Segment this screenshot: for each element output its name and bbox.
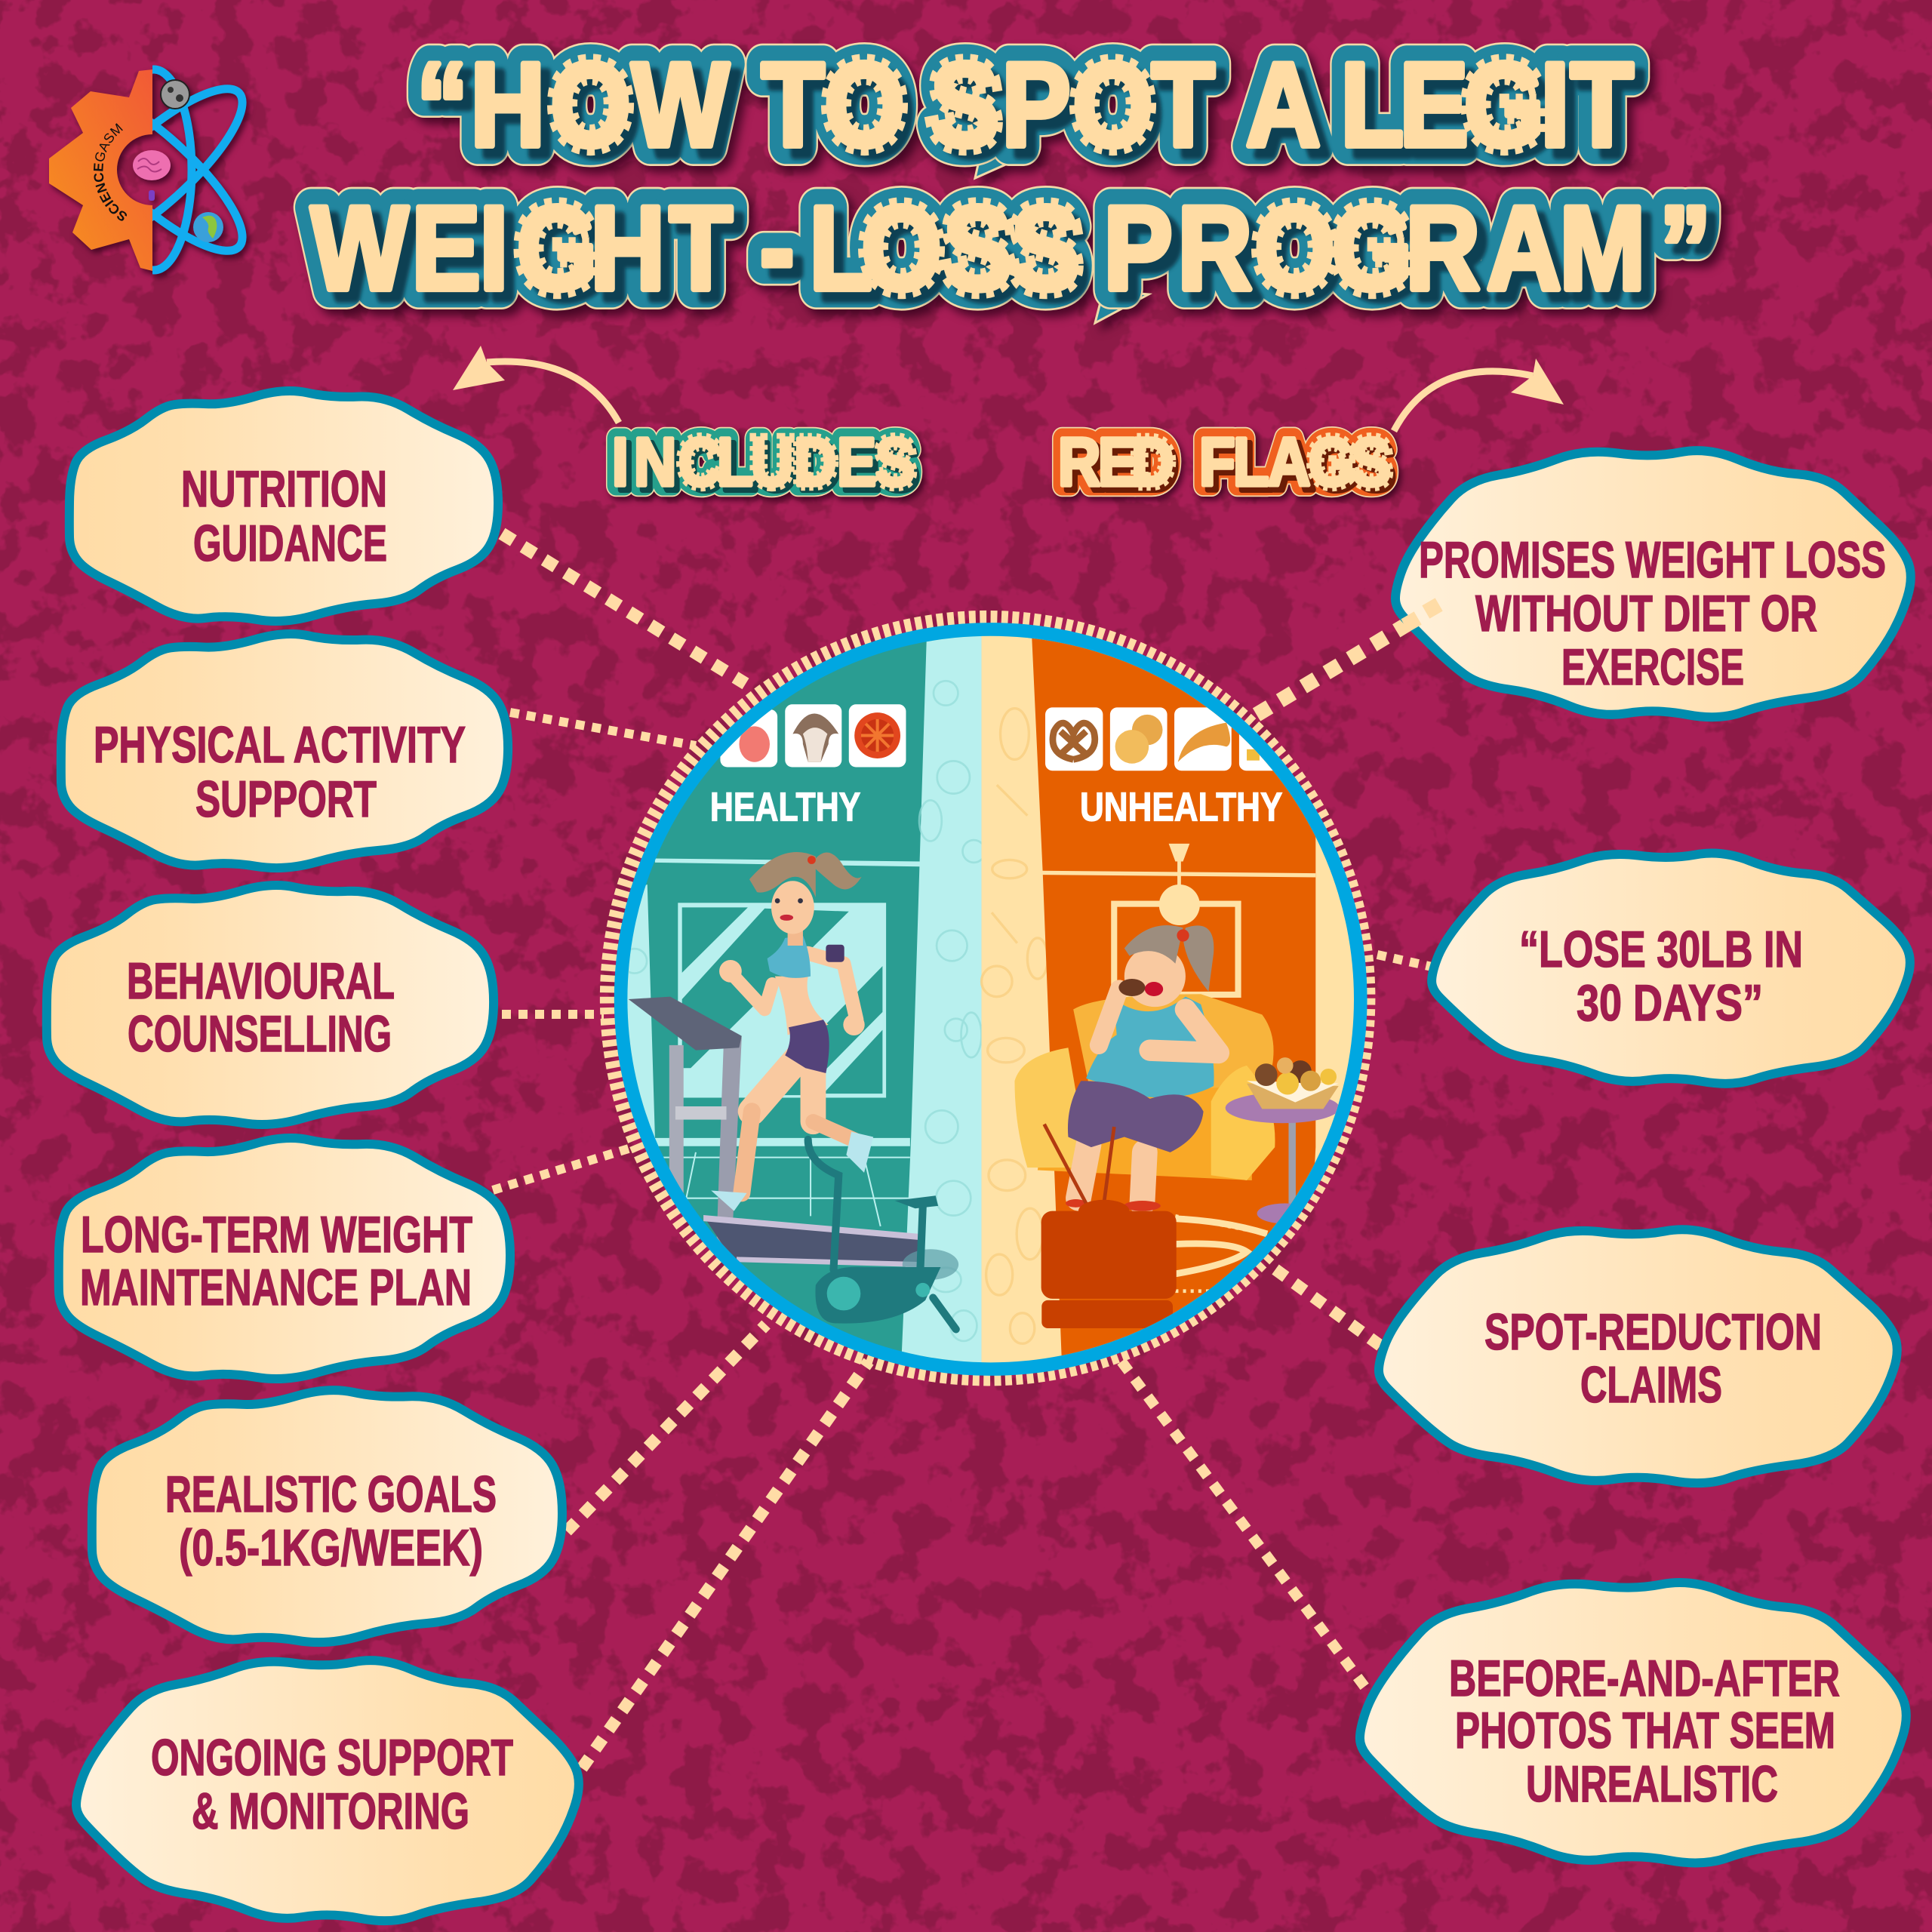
bubble: lose 30lb in 30 days: “LOSE 30LB IN bbox=[1519, 921, 1803, 978]
bubble: lose 30lb in 30 days: 30 DAYS” bbox=[1577, 974, 1763, 1032]
arrow: includes bbox=[453, 346, 619, 423]
heading: includes: INCLUDES bbox=[612, 424, 915, 500]
bubble: nutrition guidance: NUTRITION bbox=[181, 460, 387, 518]
bubble: promises weight loss without diet or exercise: WITHOUT DIET OR bbox=[1475, 585, 1817, 642]
bubble: long-term weight maintenance plan: LONG-TERM WEIGHT bbox=[81, 1206, 472, 1263]
title line 1: “HOW TO SPOT A LEGIT bbox=[426, 48, 1642, 180]
bubble: ongoing support and monitoring bbox=[76, 1660, 579, 1921]
bubble: long-term weight maintenance plan bbox=[59, 1138, 510, 1379]
title line 1: “HOW TO SPOT A LEGIT bbox=[417, 39, 1633, 171]
healthy food cards bbox=[720, 704, 906, 767]
bubble: spot-reduction claims: CLAIMS bbox=[1580, 1356, 1722, 1414]
bubble: physical activity support bbox=[61, 634, 508, 868]
bubble: before-and-after photos bbox=[1360, 1583, 1906, 1863]
bubble: physical activity support: SUPPORT bbox=[195, 771, 377, 828]
heading: includes: CUDS bbox=[678, 424, 915, 500]
arrow: red flags bbox=[1394, 358, 1564, 431]
bubble: behavioural counselling bbox=[47, 885, 494, 1124]
treadmill bbox=[629, 997, 958, 1280]
bubble: ongoing support and monitoring: & MONITORING bbox=[192, 1783, 469, 1840]
title line 1: OOSOG bbox=[551, 39, 1544, 171]
heading: includes: INCLUDES bbox=[617, 429, 919, 504]
bubble: ongoing support and monitoring: ONGOING SUPPORT bbox=[151, 1729, 513, 1786]
heading: red flags: RED FLAGS bbox=[1058, 424, 1391, 500]
bubble: nutrition guidance bbox=[69, 391, 498, 621]
bubble: long-term weight maintenance plan: MAINTENANCE PLAN bbox=[80, 1259, 472, 1316]
seated woman bbox=[1066, 925, 1219, 1211]
dashed ring bbox=[610, 620, 1365, 1376]
unhealthy label: UNHEALTHY bbox=[1080, 784, 1282, 829]
unhealthy food cards bbox=[1045, 707, 1298, 771]
title bbox=[311, 39, 1720, 324]
bubble: physical activity support: PHYSICAL ACTIVITY bbox=[94, 716, 466, 774]
runner woman bbox=[711, 852, 873, 1211]
heading: red flags: DGS bbox=[1131, 424, 1391, 500]
side table with basket bbox=[1226, 1057, 1340, 1223]
title line 2: WEIGHT -LOSS PROGRAM” bbox=[311, 183, 1711, 315]
bubble: lose 30lb in 30 days bbox=[1432, 854, 1910, 1084]
title line 2: WEIGHT -LOSS PROGRAM” bbox=[320, 192, 1720, 324]
logo: Sciencegasm gear and atom: SCIENCEGASM bbox=[94, 123, 127, 221]
title line 2: WEIGHT -LOSS PROGRAM” bbox=[311, 183, 1711, 315]
healthy half: gym scene bbox=[627, 635, 1354, 1363]
rug bbox=[1165, 1214, 1272, 1295]
bubble: behavioural counselling: BEHAVIOURAL bbox=[127, 952, 395, 1010]
unhealthy half: living room scene bbox=[980, 635, 1354, 1363]
bubble: realistic goals bbox=[92, 1390, 562, 1642]
heading: red flags: RED FLAGS bbox=[1058, 424, 1391, 500]
heading: red flags: RED FLAGS bbox=[1063, 429, 1395, 504]
bubble: behavioural counselling: COUNSELLING bbox=[128, 1005, 392, 1063]
title line 1: “HOW TO SPOT A LEGIT bbox=[417, 39, 1633, 171]
title line 1: “HOW TO SPOT A LEGIT bbox=[417, 39, 1633, 171]
bubble: promises weight loss without diet or exercise bbox=[1395, 451, 1911, 717]
exercise bike bbox=[808, 1140, 956, 1329]
bubble: before-and-after photos: UNREALISTIC bbox=[1526, 1755, 1778, 1813]
armchair bbox=[1014, 994, 1275, 1180]
blue ring bbox=[621, 630, 1360, 1368]
bubble: spot-reduction claims bbox=[1379, 1229, 1897, 1483]
panel: centre circle illustration bbox=[589, 596, 1389, 1396]
bubble: spot-reduction claims: SPOT-REDUCTION bbox=[1484, 1303, 1822, 1361]
connectors: dashed lines from bubbles to centre circle bbox=[493, 534, 1441, 1768]
television bbox=[1041, 1124, 1177, 1328]
bubble: promises weight loss without diet or exercise: EXERCISE bbox=[1561, 638, 1744, 696]
healthy label: HEALTHY bbox=[710, 784, 860, 829]
bubble: realistic goals: REALISTIC GOALS bbox=[165, 1466, 497, 1523]
heading: red flags: RED FLAGS bbox=[1058, 424, 1391, 500]
heading: includes: INCLUDES bbox=[612, 424, 915, 500]
heading: includes: INCLUDES bbox=[612, 424, 915, 500]
bubble: nutrition guidance: GUIDANCE bbox=[193, 515, 387, 572]
title line 2: WEIGHT -LOSS PROGRAM” bbox=[311, 183, 1711, 315]
logo: Sciencegasm gear and atom bbox=[48, 65, 253, 281]
bubble: realistic goals: (0.5-1KG/WEEK) bbox=[179, 1519, 483, 1577]
title line 2: GOSSOG bbox=[517, 183, 1412, 315]
